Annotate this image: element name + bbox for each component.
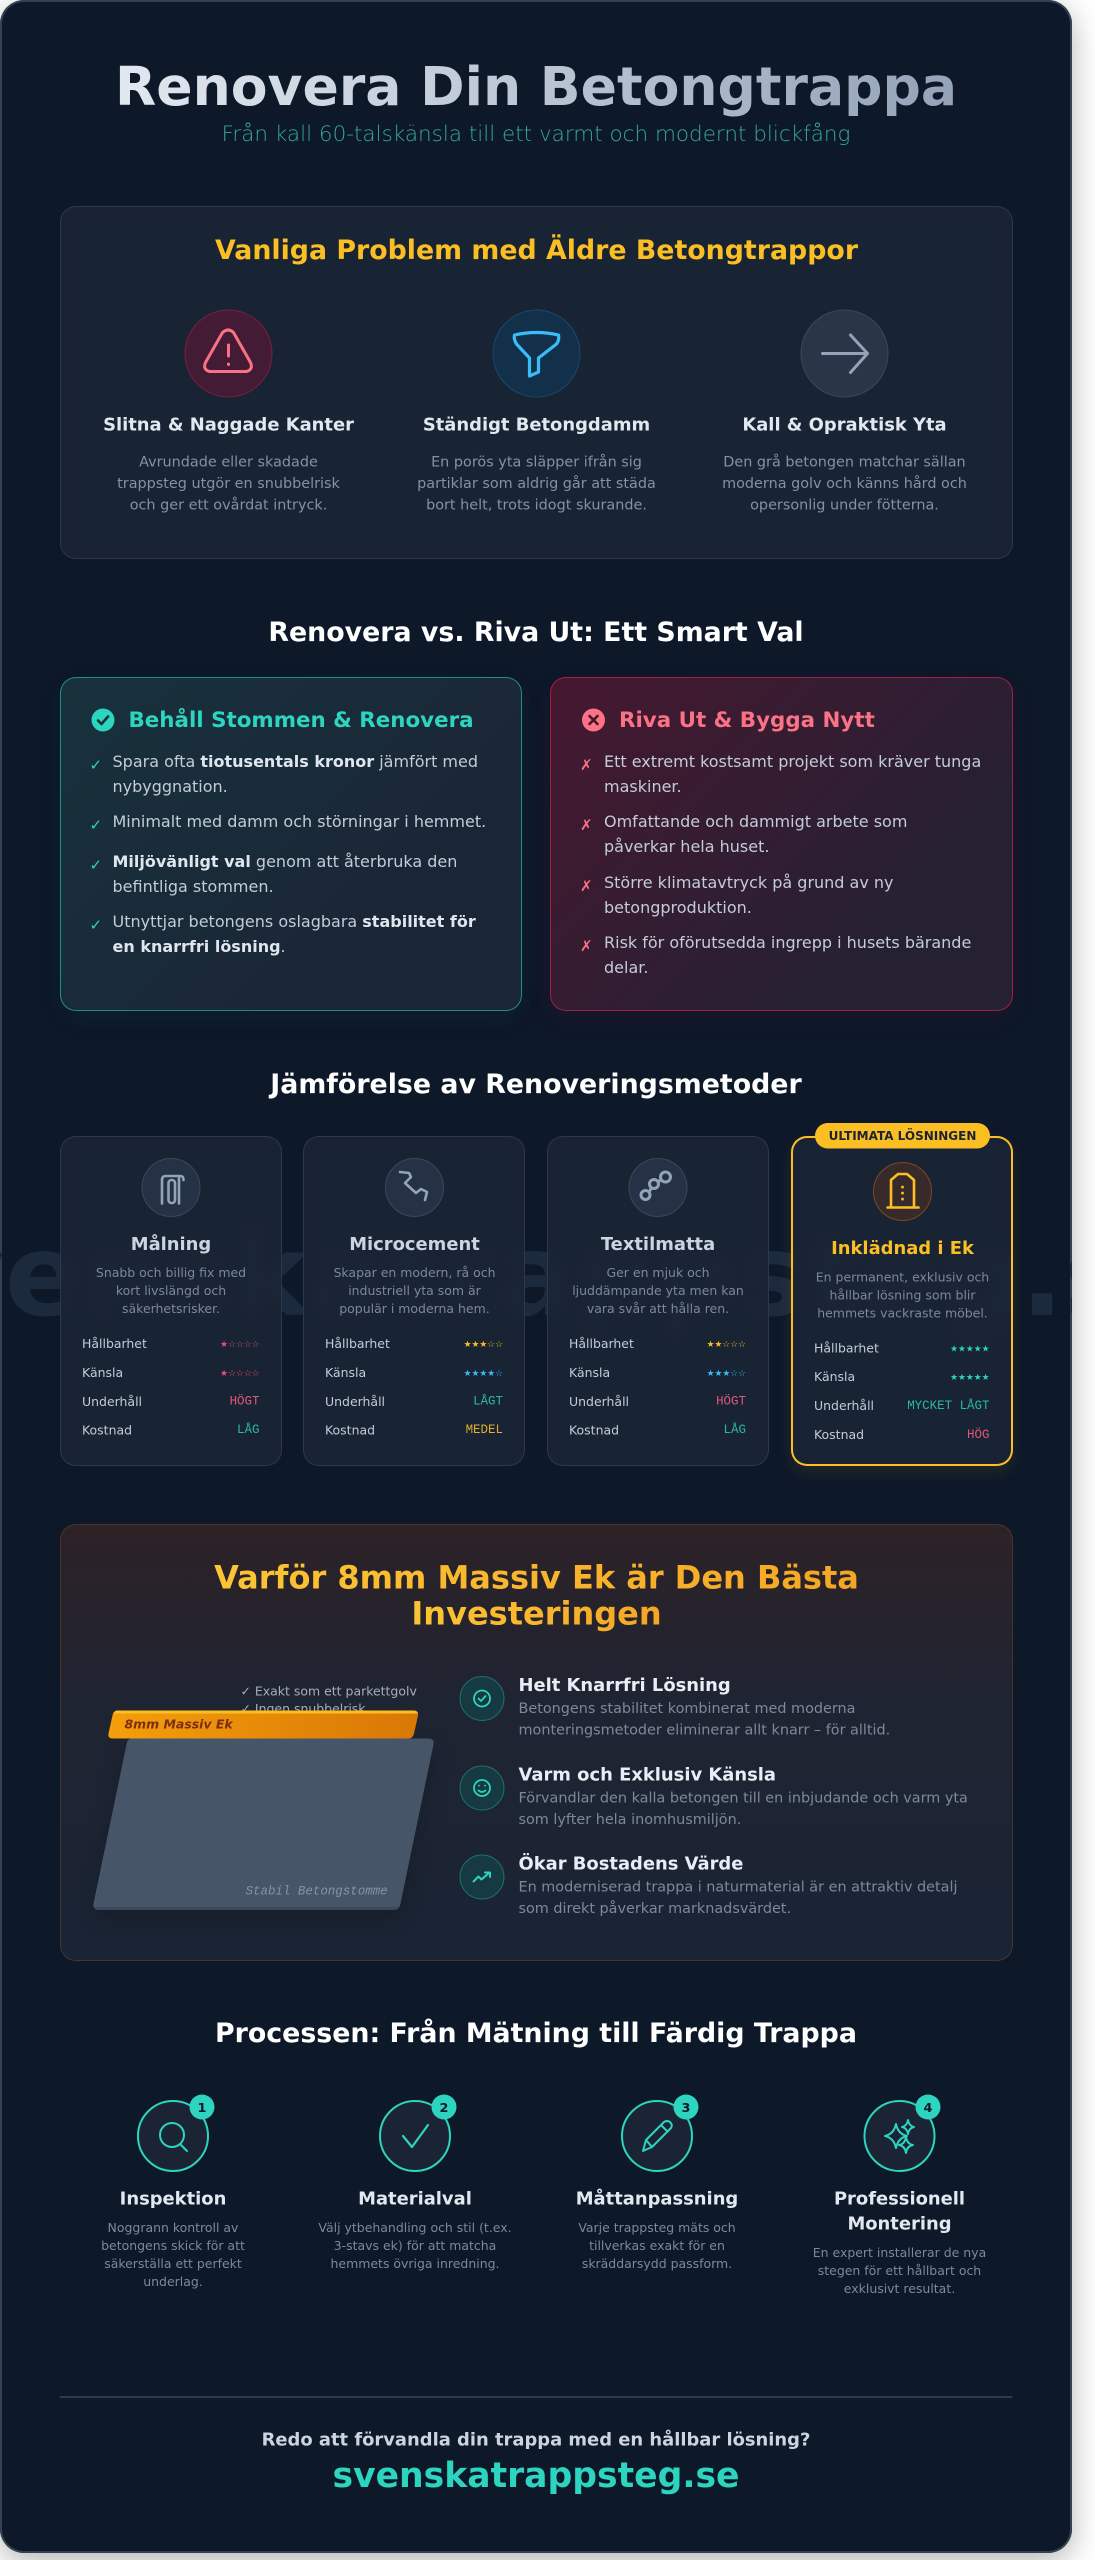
- ratings: [569, 1336, 747, 1438]
- problem: cold surface: [722, 310, 966, 514]
- icon: sparkles: [885, 2120, 914, 2153]
- card: painting: Målning: [130, 1233, 211, 1255]
- panel heading: Varför 8mm Massiv Ek är Den Bästa: [214, 1558, 858, 1596]
- problem: worn edges: [103, 310, 354, 514]
- card: microcement: Microcement: [349, 1234, 480, 1255]
- problem: worn edges: Slitna & Naggade Kanter: [103, 414, 354, 436]
- ratings: ★☆☆☆☆: [220, 1340, 259, 1350]
- step 1: inspection: underlag.: [143, 2274, 203, 2289]
- step 4: installation: 4: [924, 2101, 933, 2116]
- feature: creak free: [460, 1674, 890, 1738]
- step 1: inspection: 1: [198, 2101, 207, 2116]
- card: painting: kort livslängd och: [115, 1283, 226, 1298]
- card: carpet: [547, 1136, 769, 1466]
- panel heading: Vanliga Problem med Äldre Betongtrappor: [214, 234, 858, 266]
- feature: value: Ökar Bostadens Värde: [518, 1852, 743, 1874]
- drawbacks list: ✗: [580, 756, 593, 774]
- card: carpet: Ger en mjuk och: [606, 1265, 710, 1280]
- ratings: HÖG: [967, 1428, 989, 1442]
- panel heading: Investeringen: [411, 1594, 661, 1632]
- feature: creak free: monteringsmetoder eliminerar allt knarr – för alltid.: [518, 1722, 890, 1738]
- card: carpet: ljuddämpande yta men kan: [572, 1283, 744, 1298]
- ratings: Hållbarhet: [814, 1340, 878, 1356]
- card: painting: [60, 1136, 282, 1466]
- heading with check icon: Behåll Stommen & Renovera: [128, 707, 473, 733]
- ratings: [325, 1336, 504, 1438]
- ratings: Kostnad: [82, 1422, 132, 1438]
- problem: cold surface: Kall & Opraktisk Yta: [742, 414, 946, 436]
- oak plank: 8mm Massiv Ek: [124, 1716, 233, 1731]
- card: oak cladding: En permanent, exklusiv och: [815, 1270, 989, 1284]
- ratings: Kostnad: [569, 1422, 619, 1438]
- panel: why oak: [60, 1524, 1012, 1960]
- step 1: inspection: Inspektion: [120, 2188, 226, 2210]
- benefits list: befintliga stommen.: [112, 877, 273, 896]
- feature: value: som direkt påverkar marknadsvärdet.: [518, 1900, 791, 1916]
- ratings: HÖGT: [229, 1394, 260, 1408]
- ratings: LÅGT: [473, 1394, 504, 1408]
- icon: smile: [460, 1766, 504, 1810]
- benefits list: [89, 752, 486, 956]
- benefits list: Spara ofta tiotusentals kronor jämfört med: [112, 752, 478, 771]
- ratings: Underhåll: [569, 1394, 629, 1409]
- drawbacks list: ✗: [580, 816, 593, 834]
- panel heading: [214, 1558, 858, 1632]
- benefits list: Minimalt med damm och störningar i hemmet.: [112, 812, 486, 831]
- ratings: [814, 1340, 990, 1442]
- panel: common problems: [60, 206, 1012, 559]
- title: Renovera Din Betongtrappa: [115, 55, 957, 118]
- icon: warning triangle: [184, 310, 272, 397]
- feature: warm feel: Förvandlar den kalla betongen till en inbjudande och varm yta: [518, 1790, 967, 1806]
- drawbacks list: Omfattande och dammigt arbete som: [604, 812, 907, 831]
- step 4: installation: [813, 2094, 986, 2296]
- ratings: Underhåll: [814, 1398, 874, 1413]
- footer url: svenskatrappsteg.se: [332, 2456, 740, 2496]
- ratings: Hållbarhet: [325, 1336, 390, 1351]
- ratings: ★★☆☆☆: [707, 1340, 746, 1350]
- problem: concrete dust: Ständigt Betongdamm: [422, 414, 650, 436]
- problem: concrete dust: En porös yta släpper ifrån sig: [431, 454, 641, 470]
- card: oak cladding: Inklädnad i Ek: [831, 1238, 974, 1259]
- step 2: material choice: Välj ytbehandling och stil (t.ex.: [318, 2220, 512, 2235]
- step 2: material choice: [318, 2094, 512, 2271]
- ratings: ★☆☆☆☆: [220, 1369, 259, 1379]
- ratings: Hållbarhet: [569, 1336, 634, 1351]
- ratings: MYCKET LÅGT: [907, 1398, 990, 1413]
- feature: creak free: Betongens stabilitet kombinerat med moderna: [518, 1700, 855, 1716]
- drawbacks list: Större klimatavtryck på grund av ny: [604, 873, 894, 892]
- stair cross-section illustration: [93, 1683, 433, 1910]
- ratings: ★★★★☆: [464, 1369, 503, 1379]
- ratings: ★★★★★: [950, 1373, 989, 1383]
- benefits list: ✓: [89, 756, 102, 774]
- card: oak cladding: hållbar lösning som blir: [829, 1288, 976, 1302]
- ratings: MEDEL: [466, 1423, 503, 1437]
- ratings: Känsla: [325, 1365, 366, 1380]
- badge: [814, 1123, 990, 1148]
- drawbacks list: Ett extremt kostsamt projekt som kräver tunga: [604, 752, 981, 771]
- icon: arch: [873, 1162, 931, 1220]
- drawbacks list: ✗: [580, 877, 593, 895]
- step 3: custom fit: [576, 2094, 738, 2271]
- icon: pencil: [643, 2121, 672, 2151]
- problem: worn edges: trappsteg utgör en snubbelrisk: [117, 476, 340, 492]
- drawbacks list: påverkar hela huset.: [604, 837, 769, 856]
- card: painting: säkerhetsrisker.: [122, 1301, 219, 1316]
- drawbacks list: Risk för oförutsedda ingrepp i husets bärande: [604, 933, 971, 952]
- problem: concrete dust: partiklar som aldrig går att städa: [417, 475, 655, 492]
- ratings: Känsla: [82, 1365, 123, 1380]
- step 1: inspection: betongens skick för att: [101, 2238, 245, 2253]
- step 4: installation: En expert installerar de nya: [813, 2245, 986, 2260]
- oak feature notes: ✓ Ingen snubbelrisk: [240, 1700, 366, 1716]
- drawbacks list: ✗: [580, 937, 593, 955]
- benefits list: en knarrfri lösning.: [112, 937, 285, 956]
- ratings: Hållbarhet: [82, 1336, 146, 1351]
- drawbacks list: delar.: [604, 958, 648, 977]
- card: microcement: populär i moderna hem.: [339, 1301, 490, 1316]
- card: carpet: Textilmatta: [601, 1234, 715, 1255]
- ratings: Underhåll: [325, 1394, 385, 1409]
- step 3: custom fit: tillverkas exakt för en: [589, 2238, 725, 2253]
- icon: trending up: [460, 1854, 504, 1898]
- feature: creak free: Helt Knarrfri Lösning: [518, 1674, 730, 1696]
- icon: funnel: [492, 310, 580, 397]
- benefits list: nybyggnation.: [112, 777, 227, 796]
- icon: roller: [142, 1158, 200, 1216]
- ratings: ★★★☆☆: [707, 1369, 746, 1379]
- icon: textile rings: [629, 1158, 687, 1216]
- heading: method comparison: Jämförelse av Renoveringsmetoder: [268, 1069, 802, 1100]
- problem: cold surface: moderna golv och känns hård och: [722, 475, 966, 492]
- card: carpet: vara svår att hålla ren.: [587, 1301, 729, 1316]
- feature: value: [460, 1852, 957, 1916]
- step 1: inspection: [101, 2094, 245, 2289]
- step 2: material choice: hemmets övriga inredning.: [331, 2256, 499, 2271]
- step 4: installation: Montering: [847, 2214, 952, 2234]
- feature: warm feel: Varm och Exklusiv Känsla: [518, 1764, 775, 1785]
- step 3: custom fit: Måttanpassning: [576, 2188, 738, 2210]
- problem: worn edges: Avrundade eller skadade: [139, 454, 318, 470]
- ratings: Kostnad: [814, 1427, 864, 1442]
- concrete block: Stabil Betongstomme: [245, 1884, 387, 1898]
- heading: process: Processen: Från Mätning till Färdig Trappa: [215, 2017, 857, 2049]
- problem: concrete dust: bort helt, trots idogt skurande.: [426, 498, 646, 514]
- ratings: Känsla: [569, 1365, 610, 1380]
- benefits list: ✓: [89, 916, 102, 934]
- card: microcement: Skapar en modern, rå och: [334, 1265, 495, 1280]
- problem: worn edges: och ger ett ovårdat intryck.: [129, 496, 327, 514]
- feature: value: En moderniserad trappa i naturmaterial är en attraktiv detalj: [518, 1879, 957, 1895]
- icon: check: [403, 2125, 428, 2147]
- icon: check circle: [460, 1676, 504, 1720]
- feature: warm feel: som lyfter hela inomhusmiljön.: [518, 1812, 741, 1828]
- step 4: installation: exklusivt resultat.: [844, 2281, 955, 2296]
- footer call to action: Redo att förvandla din trappa med en hållbar lösning?: [262, 2428, 810, 2450]
- drawbacks list: [580, 752, 981, 977]
- oak feature notes: ✓ Exakt som ett parkettgolv: [240, 1683, 416, 1698]
- ratings: Kostnad: [325, 1422, 375, 1438]
- heading: renovate vs demolish: Renovera vs. Riva Ut: Ett Smart Val: [268, 617, 804, 648]
- icon: magnifier: [160, 2123, 187, 2151]
- feature: warm feel: [460, 1764, 967, 1828]
- ratings: [82, 1336, 260, 1438]
- icon: crack: [386, 1158, 444, 1216]
- card: microcement: industriell yta som är: [348, 1283, 482, 1298]
- problem: cold surface: opersonlig under fötterna.: [750, 498, 938, 514]
- card: microcement: [303, 1136, 525, 1466]
- concrete block: [93, 1738, 433, 1910]
- benefits list: ✓: [89, 856, 102, 874]
- card: oak cladding: [790, 1136, 1012, 1466]
- heading with cross icon: Riva Ut & Bygga Nytt: [619, 708, 875, 733]
- step 4: installation: Professionell: [834, 2188, 965, 2210]
- process section: [101, 2094, 986, 2296]
- benefits list: ✓: [89, 816, 102, 834]
- badge: ULTIMATA LÖSNINGEN: [828, 1128, 976, 1143]
- drawbacks list: maskiner.: [604, 777, 682, 796]
- step 3: custom fit: Varje trappsteg mäts och: [578, 2220, 736, 2235]
- panel: demolish: [550, 677, 1012, 1011]
- step 3: custom fit: 3: [682, 2101, 690, 2116]
- ratings: Underhåll: [82, 1394, 142, 1409]
- subtitle: Från kall 60-talskänsla till ett varmt och modernt blickfång: [222, 122, 850, 147]
- ratings: Känsla: [814, 1369, 855, 1384]
- benefits list: Utnyttjar betongens oslagbara stabilitet för: [112, 912, 475, 931]
- ratings: HÖGT: [716, 1394, 747, 1408]
- step 4: installation: stegen för ett hållbart och: [818, 2263, 981, 2278]
- oak plank: [108, 1710, 418, 1738]
- drawbacks list: betongproduktion.: [604, 898, 752, 917]
- step 2: material choice: Materialval: [358, 2188, 472, 2210]
- ratings: ★★★★★: [950, 1344, 989, 1354]
- step 1: inspection: säkerställa ett perfekt: [104, 2256, 242, 2271]
- oak feature notes: [240, 1683, 416, 1716]
- step 3: custom fit: skräddarsydd passform.: [582, 2256, 732, 2271]
- ratings: LÅG: [237, 1422, 259, 1437]
- panel: renovate: [60, 677, 522, 1011]
- ratings: ★★★☆☆: [464, 1340, 503, 1350]
- benefits list: Miljövänligt val genom att återbruka den: [112, 852, 457, 871]
- step 1: inspection: Noggrann kontroll av: [108, 2220, 238, 2235]
- step 2: material choice: 3-stavs ek) för att matcha: [334, 2238, 496, 2253]
- step 2: material choice: 2: [440, 2101, 448, 2116]
- problem: cold surface: Den grå betongen matchar sällan: [723, 454, 965, 470]
- card: oak cladding: hemmets vackraste möbel.: [817, 1306, 987, 1320]
- icon: arrow: [800, 310, 888, 397]
- card: painting: Snabb och billig fix med: [95, 1265, 246, 1280]
- ratings: LÅG: [724, 1422, 746, 1437]
- problem: concrete dust: [417, 310, 655, 514]
